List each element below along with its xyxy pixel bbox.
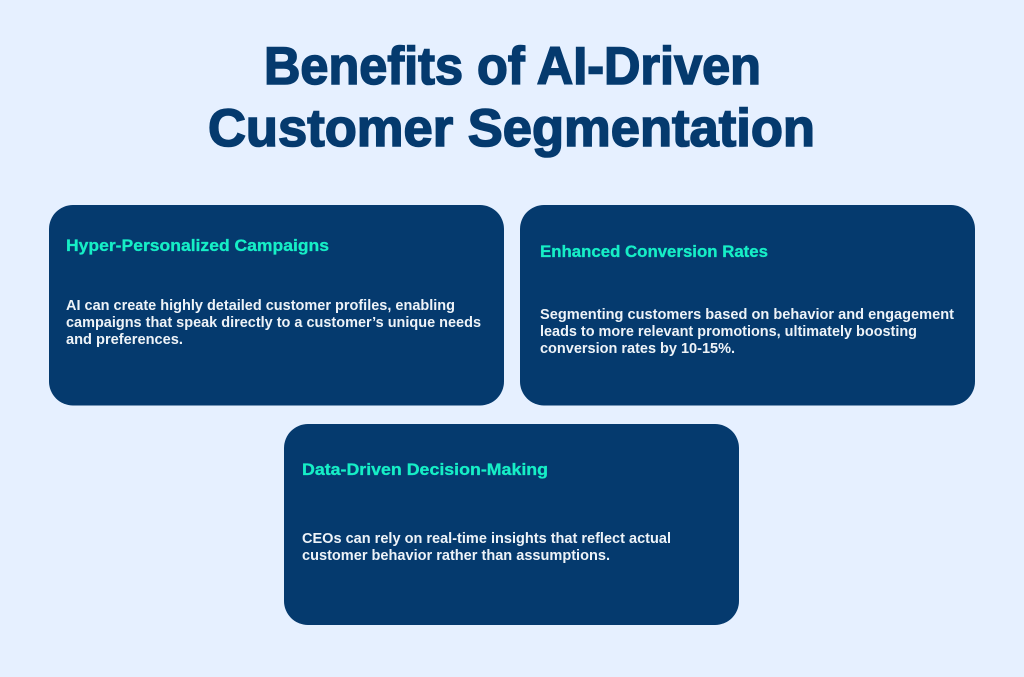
panel: hyper-personalized campaigns xyxy=(49,205,504,406)
text block: hyper-personalized description: and preferences. xyxy=(66,332,183,348)
text block: data-driven description: CEOs can rely on real-time insights that reflect actual xyxy=(302,531,671,547)
text block: enhanced conversion description: Segmenting customers based on behavior and engagement xyxy=(540,307,954,323)
heading: enhanced conversion rates: Enhanced Conversion Rates xyxy=(540,242,768,261)
text block: hyper-personalized description: campaigns that speak directly to a customer’s unique needs xyxy=(66,315,481,331)
text block: hyper-personalized description: AI can create highly detailed customer profiles, enabling xyxy=(66,298,455,314)
title xyxy=(208,37,815,158)
text block: enhanced conversion description: leads to more relevant promotions, ultimately boosting xyxy=(540,324,917,340)
text block: hyper-personalized description xyxy=(66,298,481,348)
text block: enhanced conversion description xyxy=(540,307,954,357)
panel: enhanced conversion rates xyxy=(520,205,975,406)
text block: data-driven description xyxy=(302,531,671,564)
title: Customer Segmentation xyxy=(208,99,815,158)
heading: data-driven decision-making: Data-Driven Decision-Making xyxy=(302,460,548,479)
title: Benefits of AI-Driven xyxy=(264,37,761,96)
panel: data-driven decision-making xyxy=(284,424,739,625)
text block: data-driven description: customer behavior rather than assumptions. xyxy=(302,548,610,564)
text block: enhanced conversion description: conversion rates by 10-15%. xyxy=(540,341,735,357)
heading: hyper-personalized campaigns: Hyper-Personalized Campaigns xyxy=(66,236,329,255)
